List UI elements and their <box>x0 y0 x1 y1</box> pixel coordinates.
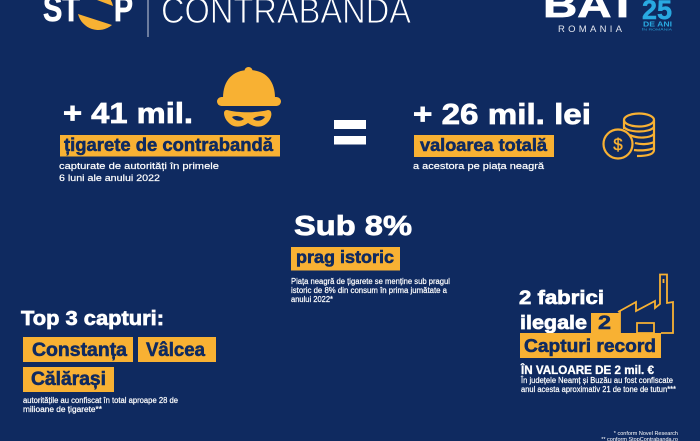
highlight: historic threshold: prag istoric <box>296 247 394 267</box>
stat: under 8 percent <box>291 210 450 304</box>
paragraph: black market share: anului 2022* <box>291 295 333 304</box>
number: + 41 mil.: + 41 mil. <box>63 98 193 130</box>
heading: 2 illegal factories: 2 fabrici <box>519 287 604 309</box>
equals sign <box>334 120 366 144</box>
logo: BAT Romania 25 de ani: DE ANI <box>643 20 672 28</box>
paragraph: black market share: Piața neagră de țigarete se menține sub pragul <box>291 277 450 286</box>
icon: masked smuggler with helmet <box>217 67 281 127</box>
caption: captured by authorities: 6 luni ale anului 2022 <box>59 173 160 184</box>
highlight: total value: valoarea totală <box>420 135 547 155</box>
paragraph: black market share: istoric de 8% din consum în prima jumătate a <box>291 286 448 295</box>
footnotes <box>601 431 678 441</box>
panel: illegal factories <box>519 274 676 394</box>
caption: 28 million cigarettes confiscated <box>23 396 178 414</box>
paragraph: black market share <box>291 277 450 304</box>
caption: 28 million cigarettes confiscated: milioane de țigarete** <box>23 405 102 414</box>
icon: coins <box>604 114 654 158</box>
icon: coins: $ <box>613 135 623 154</box>
highlight: number 2 <box>591 312 620 334</box>
panel: top 3 captures <box>21 307 216 414</box>
tag: Constanța: Constanța <box>32 340 127 361</box>
footnotes: * conform Novel Research <box>614 431 678 437</box>
heading: 2 illegal factories: ilegale <box>520 312 587 334</box>
logo: Stop Contrabanda <box>43 0 411 37</box>
caption: captured by authorities <box>59 161 219 184</box>
stat: 41 million cigarettes <box>59 98 280 184</box>
heading: Sub 8%: Sub 8% <box>294 210 412 241</box>
caption: on the black market: a acestora pe piața neagră <box>413 161 544 171</box>
text: value 2 million euro: ÎN VALOARE DE 2 mil. € <box>520 362 654 377</box>
logo: BAT Romania 25 de ani: ÎN ROMÂNIA <box>640 26 672 32</box>
highlight: contraband cigarettes: țigarete de contrabandă <box>64 134 274 155</box>
caption: 28 million cigarettes confiscated: autoritățile au confiscat în total aproape 28 de <box>23 396 178 405</box>
logo: BAT Romania 25 de ani: ROMANIA <box>558 24 623 35</box>
tag: Vâlcea <box>138 337 216 362</box>
tag: Călărași: Călărași <box>31 369 106 390</box>
caption: captured by authorities: capturate de autorități în primele <box>59 161 219 172</box>
paragraph: seizures in Neamț and Buzău: anul acesta aproximativ 21 de tone de tutun*** <box>521 385 676 394</box>
heading: 2 illegal factories <box>519 287 604 334</box>
paragraph: seizures in Neamț and Buzău <box>520 376 676 394</box>
icon: factory <box>618 274 673 333</box>
stat: 26 million lei <box>413 99 591 171</box>
highlight: number 2: 2 <box>598 312 611 334</box>
heading: Top 3 capturi: Top 3 capturi: <box>21 307 164 330</box>
tag: Călărași <box>23 367 114 392</box>
number: + 26 mil. lei: + 26 mil. lei <box>413 99 591 131</box>
tag: Vâlcea: Vâlcea <box>146 340 205 361</box>
paragraph: seizures in Neamț and Buzău: În județele Neamț și Buzău au fost confiscate <box>520 376 673 385</box>
logo: BAT Romania 25 de ani <box>543 0 672 35</box>
highlight: record captures: Capturi record <box>524 336 656 356</box>
